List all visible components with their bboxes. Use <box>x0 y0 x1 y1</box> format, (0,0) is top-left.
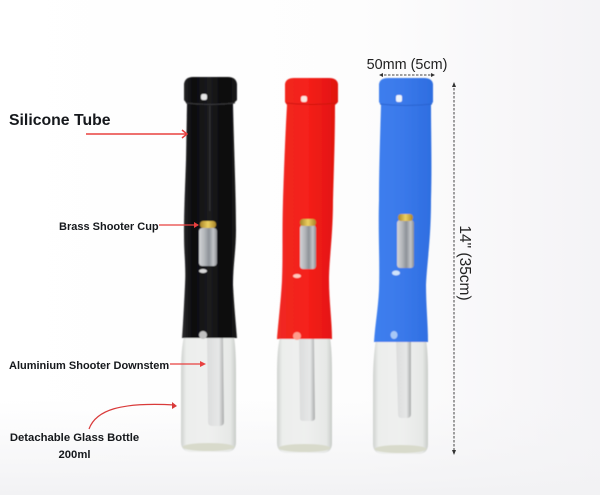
product: red tube and bottle <box>277 78 338 453</box>
arrow: glass bottle curve <box>89 402 177 429</box>
label: aluminium shooter downstem: Aluminium Shooter Downstem <box>9 360 169 372</box>
aluminium downstem <box>207 336 224 426</box>
heading: Silicone Tube: Silicone Tube <box>9 112 111 129</box>
glass bottle <box>181 336 236 452</box>
brass shooter cup with metal bowl <box>300 219 316 269</box>
silicone tube <box>374 78 433 342</box>
silicone tube <box>277 78 338 339</box>
dimension label: height: 14" (35cm) <box>456 225 473 301</box>
brass shooter cup with metal bowl <box>397 214 414 268</box>
product: blue tube and bottle <box>373 78 433 454</box>
glass bottle <box>277 337 332 453</box>
aluminium downstem <box>396 340 411 418</box>
arrow: brass shooter cup <box>159 222 199 228</box>
dimension arrow: height <box>452 82 456 455</box>
dimension label: width: 50mm (5cm) <box>367 57 447 73</box>
label: detachable glass bottle: Detachable Glass Bottle <box>10 432 139 444</box>
brass shooter cup with metal bowl <box>199 221 217 266</box>
silicone tube <box>182 77 237 338</box>
dimension arrow: width <box>379 73 435 77</box>
glass bottle <box>373 339 428 454</box>
aluminium downstem <box>299 337 315 421</box>
arrow: silicone tube <box>86 130 187 138</box>
label: detachable glass bottle: 200ml <box>58 449 91 461</box>
label: brass shooter cup: Brass Shooter Cup <box>59 221 159 233</box>
arrow: aluminium shooter downstem <box>170 361 206 367</box>
product: black tube and bottle <box>181 77 237 452</box>
